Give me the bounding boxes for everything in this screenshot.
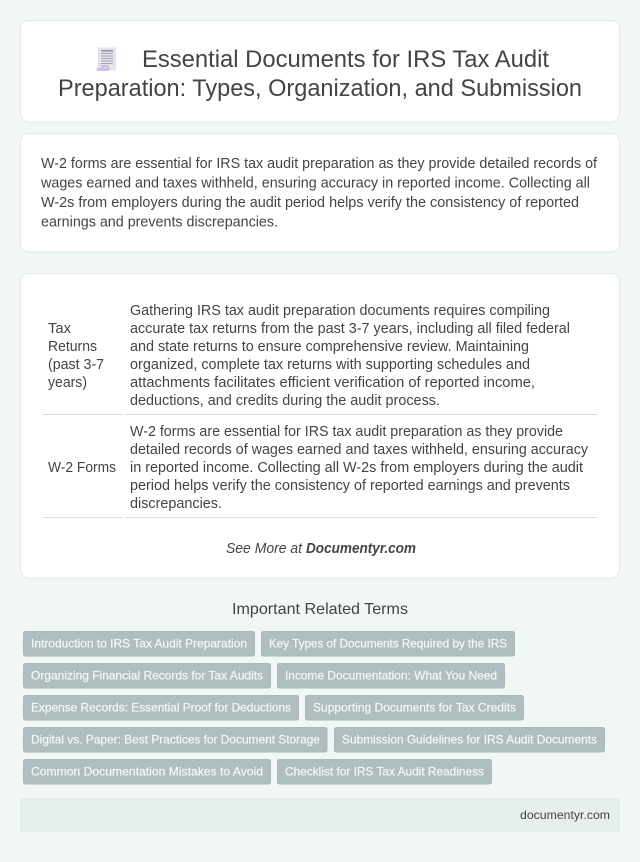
related terms tags [24,632,604,784]
tag [278,664,504,688]
row text: W-2 forms: detailed records of wages earned and taxes withheld, ensuring accuracy [130,442,589,458]
summary text [40,155,598,230]
footer bar: documentyr.com [520,808,610,822]
row text: W-2 forms: in reported income. Collecting all W-2s from employers during the audit [130,460,583,476]
tag [334,728,604,752]
summary text: W-2s from employers during the audit period helps verify the consistency of reported [41,194,579,211]
row text: tax returns: organized, complete tax returns with supporting schedules and [130,357,530,373]
row text: W-2 forms: period helps verify the consistency of reported earnings and prevents [130,478,570,494]
footer bar [20,798,620,832]
see more link [226,541,416,557]
row text: tax returns: deductions, and credits during the audit process. [130,393,440,409]
tag: Common Documentation Mistakes to Avoid [31,764,263,778]
summary text: wages earned and taxes withheld, ensuring accuracy in reported income. Collecting all [40,174,590,192]
row text: tax returns [130,303,570,409]
panel: document table [20,274,620,578]
heading: related terms: Important Related Terms [232,601,408,618]
tag: Checklist for IRS Tax Audit Readiness [285,764,484,778]
tag [24,728,327,752]
tag [24,696,298,720]
panel: title header [20,20,620,122]
row text: tax returns: Gathering IRS tax audit preparation documents requires compiling [130,303,550,319]
tag: Income Documentation: What You Need [285,668,497,682]
tag: Introduction to IRS Tax Audit Preparation [31,636,247,650]
tag: Digital vs. Paper: Best Practices for Document Storage [31,732,320,746]
row label: tax returns [48,321,104,391]
title: Preparation: Types, Organization, and Submission [58,75,582,102]
tag [262,632,514,656]
summary text: earnings and prevents discrepancies. [41,214,278,230]
row text: W-2 forms: W-2 forms are essential for IRS tax audit preparation as they provide [130,424,563,440]
row text: W-2 forms [130,424,589,512]
tag: Organizing Financial Records for Tax Audits [31,668,263,682]
tag [306,696,524,720]
row text: tax returns: accurate tax returns from the past 3-7 years, including all filed federal [130,321,570,337]
row label: tax returns: Returns [48,339,97,355]
tag: Submission Guidelines for IRS Audit Documents [342,732,597,746]
tag: Expense Records: Essential Proof for Deductions [31,700,291,714]
tag [24,664,270,688]
see more link: Documentyr.com [306,541,416,557]
summary text: W-2 forms are essential for IRS tax audit preparation as they provide detailed records of [41,155,598,172]
row text: tax returns: and state returns to ensure comprehensive review. Maintaining [130,339,529,355]
row label: tax returns: Tax [48,321,72,337]
tag [24,632,254,656]
row text: W-2 forms: discrepancies. [130,496,222,512]
row label: tax returns: (past 3-7 [48,357,104,373]
icon: document scroll [96,48,116,71]
tag: Supporting Documents for Tax Credits [313,700,516,714]
tag: Key Types of Documents Required by the IRS [269,636,507,650]
panel: summary [20,134,620,252]
row label: W-2 forms: W-2 Forms [48,460,116,476]
title: Essential Documents for IRS Tax Audit [142,46,549,73]
tag [24,760,270,784]
title [58,46,582,102]
row label: tax returns: years) [48,375,87,391]
see more link: See More at [226,541,303,557]
tag [278,760,492,784]
row text: tax returns: attachments facilitates efficient verification of reported income, [130,375,535,391]
